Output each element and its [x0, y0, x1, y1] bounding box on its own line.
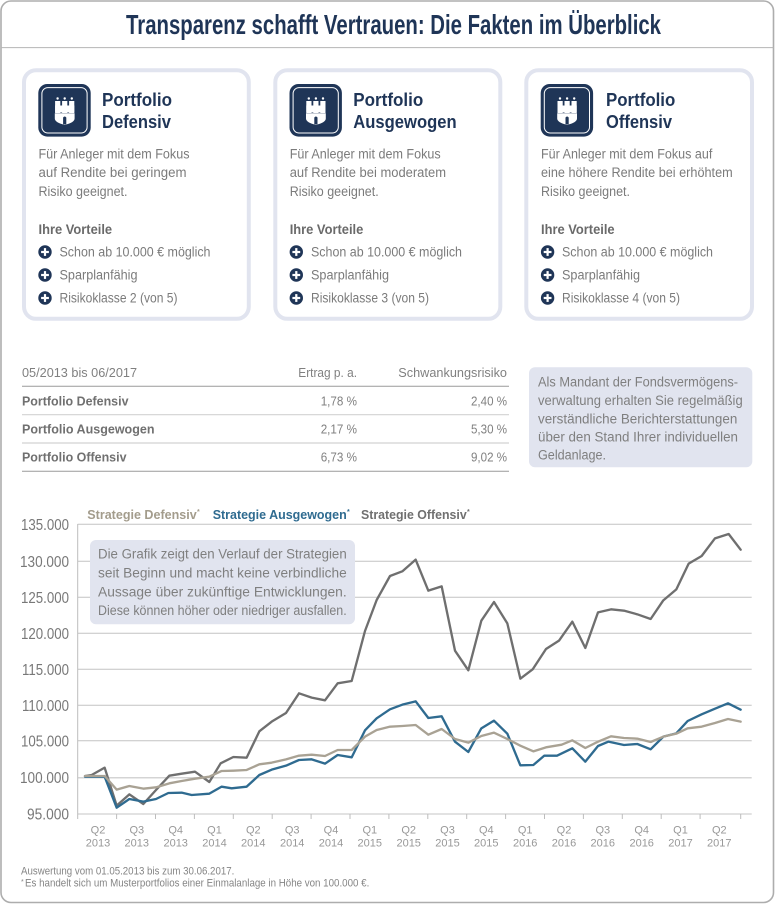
row: Defensiv: [22, 394, 507, 409]
heading: Defensiv: [102, 112, 171, 132]
y axis labels: 120.000: [21, 626, 69, 643]
x axis labels: 2013: [86, 837, 110, 849]
x axis labels: [86, 825, 732, 849]
callout: chart disclaimer: Diese können höher oder niedriger ausfallen.: [98, 603, 347, 618]
description: Für Anleger mit dem Fokus: [290, 147, 441, 162]
x axis labels: 2017: [668, 837, 693, 849]
description: eine höhere Rendite bei erhöhtem: [541, 165, 733, 180]
series: Strategie Defensiv: [85, 719, 741, 790]
callout: reporting: verständliche Berichterstattungen: [538, 411, 737, 426]
row: Ausgewogen: [22, 422, 507, 437]
x axis labels: 2016: [513, 837, 537, 849]
series lines: [85, 534, 741, 808]
heading: Portfolio: [102, 90, 172, 110]
y axis labels: 135.000: [21, 517, 69, 534]
x axis labels: 2017: [707, 837, 732, 849]
description: Risiko geeignet.: [38, 184, 128, 199]
y axis labels: 130.000: [20, 554, 69, 571]
series: Strategie Offensiv: [85, 534, 741, 806]
performance table: [22, 365, 509, 471]
footnote: [21, 865, 369, 889]
icon: crest: [541, 84, 593, 137]
panel: Portfolio Ausgewogen: [275, 70, 500, 319]
y axis labels: [20, 517, 69, 824]
benefits heading: Ihre Vorteile: [541, 222, 615, 237]
x axis labels: Q4: [479, 825, 494, 837]
row: Offensiv: [22, 450, 507, 465]
x axis labels: 2014: [319, 837, 343, 849]
benefits list: Sparplanfähig: [311, 268, 389, 282]
callout: reporting: verwaltung erhalten Sie regelmäßig: [538, 393, 743, 408]
x axis labels: Q1: [207, 825, 222, 837]
x axis labels: Q4: [324, 825, 338, 837]
heading: Offensiv: [606, 112, 672, 132]
x axis labels: Q1: [673, 825, 688, 837]
icon: crest: [38, 84, 91, 137]
description: auf Rendite bei moderatem: [290, 165, 446, 180]
y axis labels: 115.000: [22, 662, 69, 679]
series: Strategie Ausgewogen: [85, 701, 741, 808]
x axis labels: 2016: [552, 837, 576, 849]
legend: [87, 507, 470, 522]
x axis labels: 2015: [435, 837, 460, 849]
benefits heading: Ihre Vorteile: [38, 222, 113, 237]
table header: Ertrag p. a.: [298, 365, 357, 380]
x axis labels: 2016: [591, 837, 615, 849]
legend: Strategie Defensiv: [87, 507, 197, 522]
benefits list: Schon ab 10.000 € möglich: [562, 244, 713, 260]
x axis labels: Q3: [129, 825, 144, 837]
x axis labels: Q3: [440, 825, 455, 837]
callout: chart disclaimer: Aussage über zukünftige Entwicklungen.: [98, 584, 347, 599]
panel: Portfolio Offensiv: [526, 70, 752, 319]
benefits list: Risikoklasse 2 (von 5): [60, 290, 178, 306]
description: Risiko geeignet.: [290, 184, 379, 199]
x axis labels: Q2: [557, 825, 571, 837]
benefits list: [38, 244, 210, 306]
callout: chart disclaimer: [90, 540, 355, 624]
y axis labels: 125.000: [21, 590, 69, 607]
footnote: *: [21, 879, 24, 886]
y axis labels: 110.000: [22, 698, 69, 715]
row: Ausgewogen: Portfolio Ausgewogen: [22, 422, 155, 437]
x axis labels: Q3: [285, 825, 300, 837]
legend: Strategie Offensiv: [361, 507, 467, 522]
row: Offensiv: 6,73 %: [321, 450, 357, 465]
benefits list: Schon ab 10.000 € möglich: [60, 244, 210, 260]
callout: reporting: über den Stand Ihrer individuellen: [538, 430, 738, 445]
row: Ausgewogen: 2,17 %: [321, 422, 357, 437]
x axis labels: Q3: [595, 825, 610, 837]
callout: reporting: Als Mandant der Fondsvermögens-: [538, 374, 738, 389]
legend: Strategie Ausgewogen: [213, 507, 347, 522]
description: Risiko geeignet.: [541, 184, 630, 199]
row: Ausgewogen: 5,30 %: [471, 422, 507, 437]
x axis labels: Q2: [712, 825, 727, 837]
x axis labels: 2014: [280, 837, 304, 849]
x axis labels: 2015: [396, 837, 421, 849]
x axis labels: Q4: [168, 825, 183, 837]
benefits list: Schon ab 10.000 € möglich: [311, 244, 462, 260]
benefits list: Risikoklasse 4 (von 5): [562, 290, 680, 306]
x axis labels: 2015: [358, 837, 382, 849]
footnote: Auswertung vom 01.05.2013 bis zum 30.06.2017.: [21, 865, 234, 877]
legend: *: [197, 509, 200, 516]
benefits list: Risikoklasse 3 (von 5): [311, 290, 429, 306]
table header: 05/2013 bis 06/2017: [22, 365, 137, 380]
x axis labels: 2014: [202, 837, 227, 849]
x axis labels: 2015: [474, 837, 499, 849]
legend: *: [467, 509, 470, 516]
x axis labels: Q1: [518, 825, 533, 837]
grid and axes: [78, 524, 752, 819]
row: Offensiv: Portfolio Offensiv: [22, 450, 127, 465]
line chart: [20, 507, 752, 849]
benefits heading: Ihre Vorteile: [290, 222, 364, 237]
x axis labels: 2013: [125, 837, 149, 849]
y axis labels: 95.000: [27, 806, 69, 824]
heading: Portfolio: [606, 90, 675, 110]
description: Für Anleger mit dem Fokus auf: [541, 147, 713, 162]
legend: *: [347, 509, 350, 516]
description: auf Rendite bei geringem: [38, 165, 186, 180]
callout: reporting: [529, 367, 752, 467]
x axis labels: Q2: [401, 825, 416, 837]
x axis labels: 2014: [241, 837, 266, 849]
footnote: Es handelt sich um Musterportfolios einer Einmalanlage in Höhe von 100.000 €.: [25, 877, 369, 889]
x axis labels: Q2: [246, 825, 261, 837]
heading: Ausgewogen: [353, 112, 457, 132]
y axis labels: 105.000: [21, 733, 69, 750]
icon: crest: [290, 84, 342, 137]
table header: Schwankungsrisiko: [398, 365, 507, 380]
heading: Portfolio: [353, 90, 423, 110]
callout: chart disclaimer: Die Grafik zeigt den Verlauf der Strategien: [98, 546, 347, 561]
benefits list: Sparplanfähig: [562, 268, 640, 282]
x axis labels: 2013: [163, 837, 188, 849]
benefits list: [541, 244, 713, 306]
table header: [22, 365, 507, 380]
row: Defensiv: Portfolio Defensiv: [22, 394, 129, 409]
x axis labels: Q2: [91, 825, 105, 837]
row: Defensiv: 1,78 %: [321, 394, 357, 409]
x axis labels: 2016: [629, 837, 654, 849]
callout: reporting: Geldanlage.: [538, 448, 606, 462]
y axis labels: 100.000: [20, 770, 69, 787]
description: Für Anleger mit dem Fokus: [38, 147, 190, 162]
x axis labels: Q1: [362, 825, 377, 837]
callout: chart disclaimer: seit Beginn und macht keine verbindliche: [98, 565, 347, 580]
x axis labels: Q4: [634, 825, 649, 837]
row: Defensiv: 2,40 %: [471, 394, 507, 409]
benefits list: Sparplanfähig: [60, 268, 138, 282]
panel: Portfolio Defensiv: [24, 70, 249, 319]
benefits list: [290, 244, 462, 306]
row: Offensiv: 9,02 %: [471, 450, 507, 465]
